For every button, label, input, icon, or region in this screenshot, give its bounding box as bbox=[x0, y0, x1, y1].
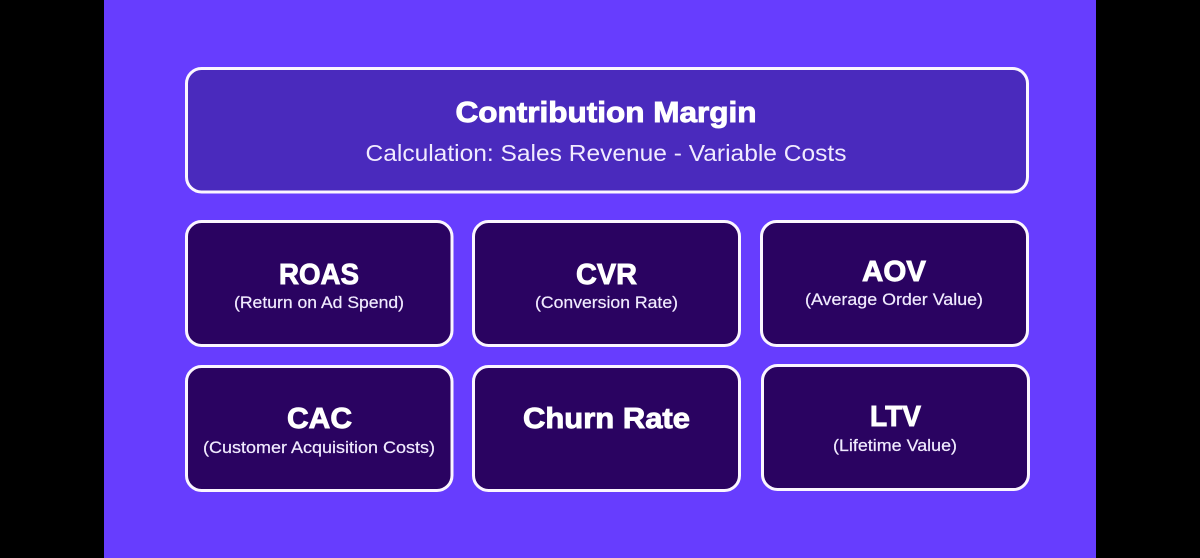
subtitle: average order value: (Average Order Value) bbox=[805, 290, 983, 309]
heading: AOV: AOV bbox=[862, 256, 927, 288]
subtitle: lifetime value: (Lifetime Value) bbox=[833, 436, 957, 455]
panel: churn rate bbox=[474, 366, 740, 490]
panel: AOV bbox=[762, 222, 1028, 346]
panel: LTV bbox=[762, 366, 1028, 490]
heading: churn rate: Churn Rate bbox=[523, 403, 690, 435]
heading: CVR: CVR bbox=[576, 259, 637, 291]
panel: ROAS bbox=[186, 222, 452, 346]
panel: CAC bbox=[186, 366, 452, 490]
heading: LTV: LTV bbox=[870, 401, 922, 433]
heading: CAC: CAC bbox=[287, 403, 352, 435]
heading: contribution margin: Contribution Margin bbox=[456, 97, 756, 129]
panel: contribution margin bbox=[186, 68, 1028, 192]
subtitle: return on ad spend: (Return on Ad Spend) bbox=[234, 293, 404, 312]
subtitle: customer acquisition costs: (Customer Acquisition Costs) bbox=[203, 438, 435, 457]
panel: CVR bbox=[474, 222, 740, 346]
heading: ROAS: ROAS bbox=[279, 259, 359, 291]
subtitle: conversion rate: (Conversion Rate) bbox=[535, 293, 678, 312]
calculation formula: Calculation: Sales Revenue - Variable Costs bbox=[366, 140, 846, 166]
